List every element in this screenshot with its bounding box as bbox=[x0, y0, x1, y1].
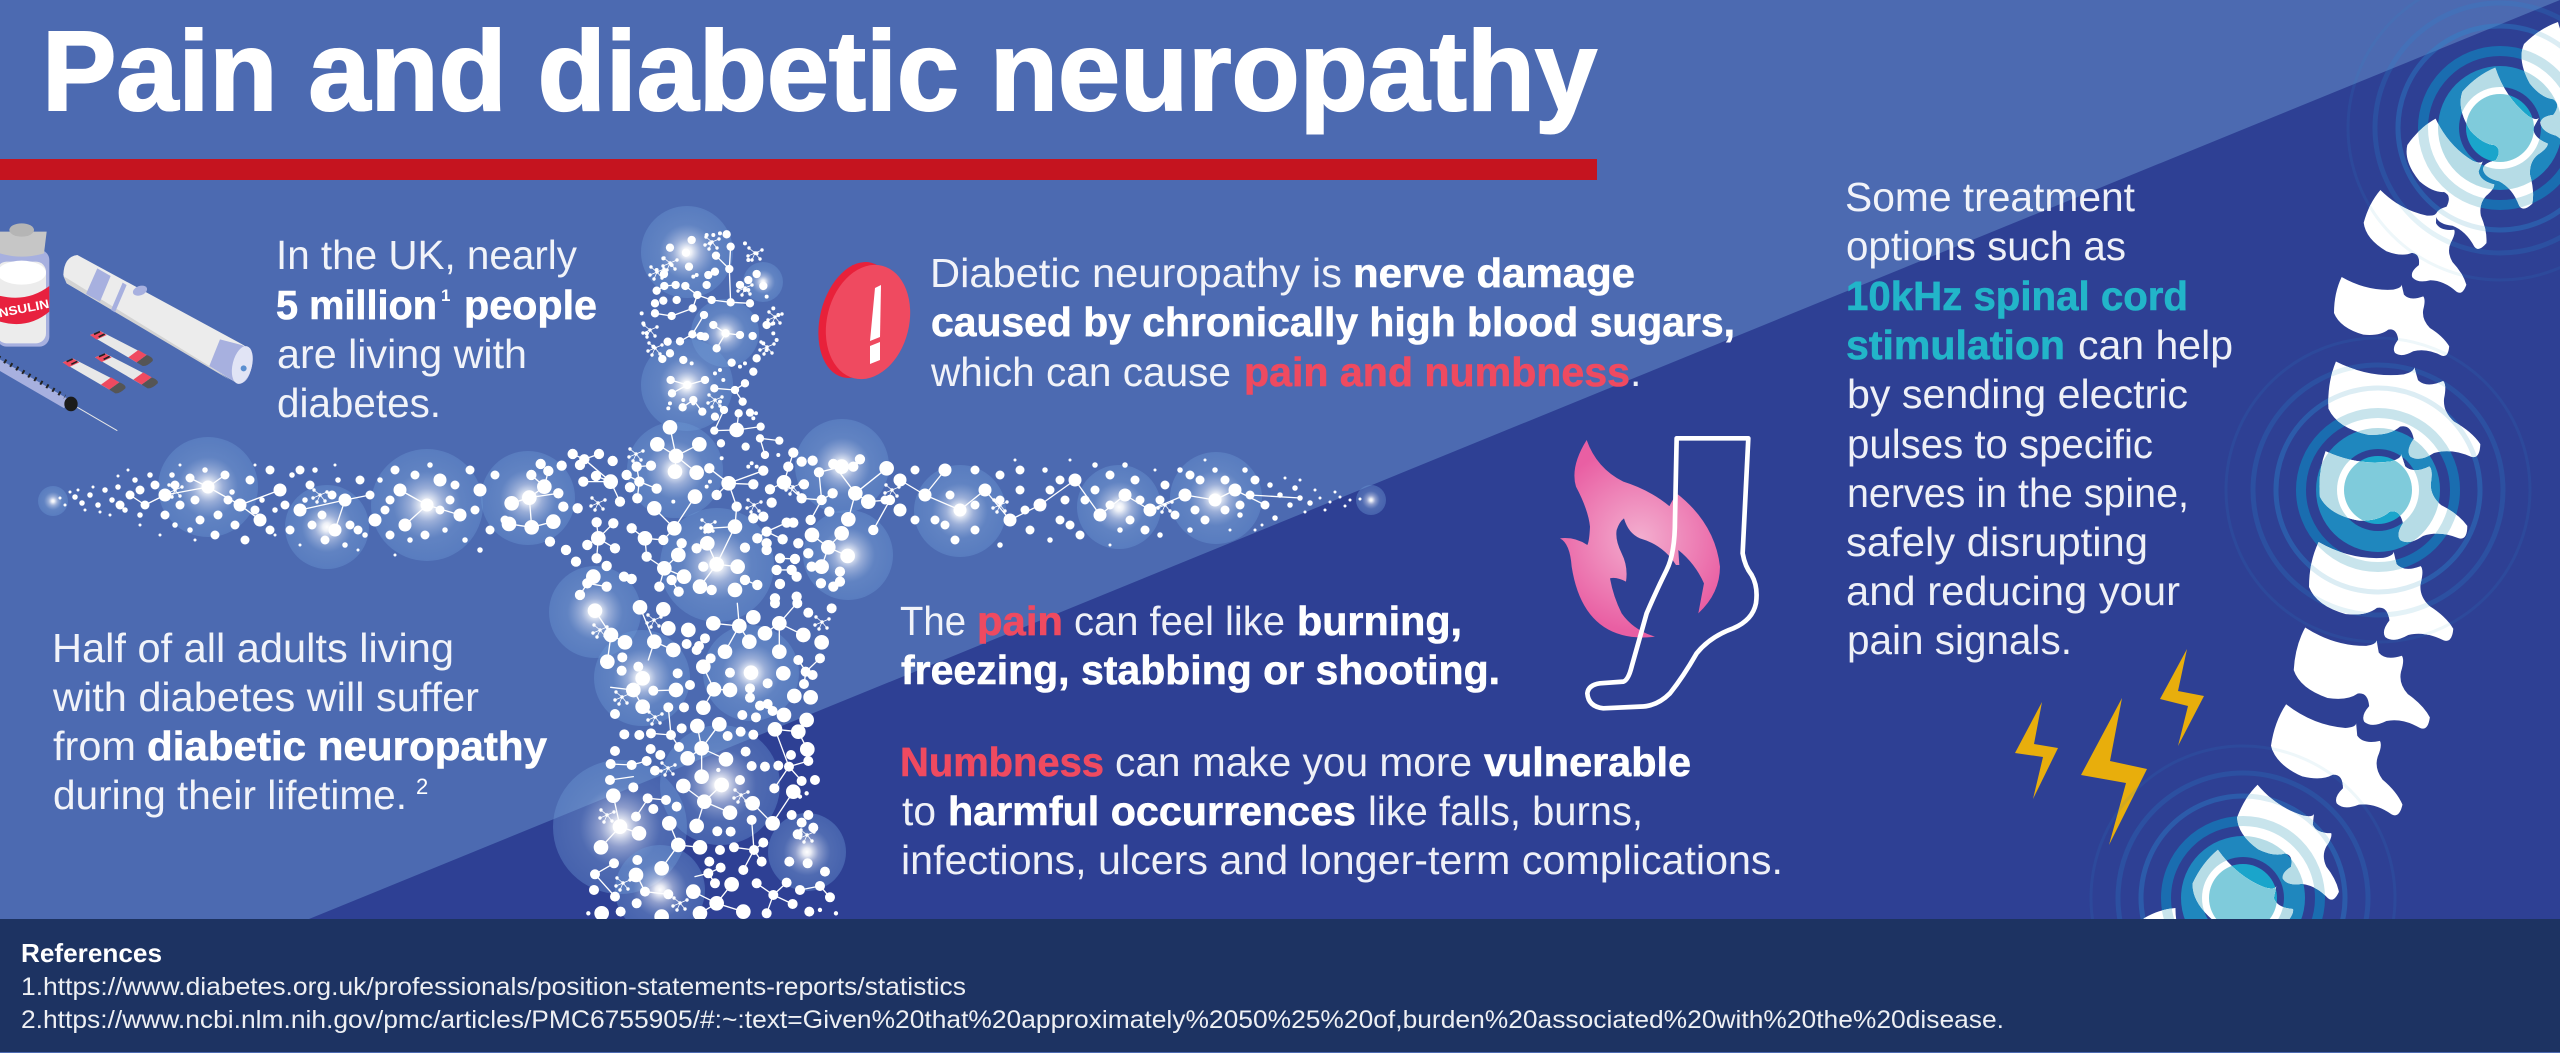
text: half of adults: during their lifetime. bbox=[53, 772, 407, 818]
text: UK statistic: diabetes. bbox=[277, 380, 441, 426]
text: definition of neuropathy: . bbox=[1630, 349, 1641, 395]
background: dark blue diagonal panel bbox=[309, 0, 2560, 919]
text: definition of neuropathy: pain and numbness bbox=[1244, 349, 1630, 395]
torso nodes bbox=[588, 603, 836, 917]
text: UK statistic: 5 million bbox=[276, 282, 437, 328]
text: half of adults: diabetic neuropathy bbox=[147, 723, 547, 769]
text: UK statistic: people bbox=[464, 282, 597, 328]
text: definition of neuropathy: Diabetic neuropathy is bbox=[930, 250, 1342, 296]
text: numbness description: like falls, burns, bbox=[1368, 788, 1643, 834]
text: UK statistic bbox=[276, 232, 597, 426]
text: treatment options: and reducing your bbox=[1846, 568, 2180, 614]
flame bbox=[1560, 440, 1720, 637]
stimulation rings bbox=[2091, 0, 2560, 1050]
text: definition of neuropathy: nerve damage bbox=[1353, 250, 1635, 296]
text: half of adults: from bbox=[53, 723, 136, 769]
footer: references panel bbox=[0, 919, 2560, 1052]
text: treatment options: 10kHz spinal cord bbox=[1846, 273, 2188, 319]
icon: exclamation warning bbox=[807, 254, 922, 388]
text: treatment options: stimulation bbox=[1846, 322, 2065, 368]
glowing bubbles bbox=[38, 206, 1386, 935]
text: UK statistic: 1 bbox=[441, 286, 450, 305]
text: treatment options: Some treatment bbox=[1845, 174, 2136, 220]
text: numbness description: Numbness bbox=[900, 739, 1104, 785]
text: numbness description: can make you more bbox=[1115, 739, 1472, 785]
text: pain description: can feel like bbox=[1074, 598, 1285, 644]
foot outline bbox=[1587, 438, 1757, 708]
text: treatment options: nerves in the spine, bbox=[1847, 470, 2189, 516]
icon: diabetes supplies bbox=[0, 223, 256, 431]
text: half of adults: Half of all adults living bbox=[52, 625, 454, 671]
text: pain description: The bbox=[900, 598, 966, 644]
insulin vial bbox=[0, 223, 50, 347]
text: pain description: freezing, stabbing or shooting. bbox=[901, 647, 1500, 693]
lancing pen bbox=[63, 255, 256, 386]
red title underline bbox=[0, 159, 1597, 180]
illustration: spine with stimulation rings bbox=[2090, 2, 2560, 919]
icon: burning foot bbox=[1560, 438, 1757, 708]
text: treatment options bbox=[1845, 174, 2233, 663]
text: numbness description: vulnerable bbox=[1484, 739, 1691, 785]
text: pain description bbox=[900, 598, 1500, 693]
text: half of adults: 2 bbox=[416, 774, 428, 799]
reference 1: 1.https://www.diabetes.org.uk/professionals/position-statements-reports/statistics bbox=[21, 973, 966, 1001]
text: half of adults bbox=[52, 625, 547, 818]
title: Pain and diabetic neuropathy bbox=[42, 8, 1597, 134]
text: treatment options: by sending electric bbox=[1847, 371, 2188, 417]
text: treatment options: options such as bbox=[1846, 223, 2126, 269]
syringe bbox=[0, 357, 117, 431]
text: definition of neuropathy bbox=[930, 250, 1735, 395]
text: definition of neuropathy: caused by chronically high blood sugars, bbox=[931, 299, 1735, 345]
text: numbness description: to bbox=[902, 788, 936, 834]
arm nodes bbox=[60, 460, 1360, 555]
text: numbness description: harmful occurrences bbox=[948, 788, 1356, 834]
text: numbness description bbox=[900, 739, 1783, 883]
text: pain description: burning, bbox=[1297, 598, 1462, 644]
test strips bbox=[63, 331, 158, 393]
text: treatment options: can help bbox=[2078, 322, 2233, 368]
references heading: References bbox=[21, 938, 162, 968]
text: UK statistic: are living with bbox=[277, 331, 527, 377]
text: UK statistic: In the UK, nearly bbox=[276, 232, 577, 278]
text: numbness description: infections, ulcers and longer-term complications. bbox=[901, 837, 1783, 883]
text: treatment options: safely disrupting bbox=[1846, 519, 2148, 565]
icon: lightning bolts bbox=[2015, 649, 2204, 845]
text: treatment options: pulses to specific bbox=[1847, 421, 2153, 467]
text: pain description: pain bbox=[977, 598, 1063, 644]
text: treatment options: pain signals. bbox=[1847, 617, 2072, 663]
human body neural network figure bbox=[38, 206, 1386, 935]
text: half of adults: with diabetes will suffer bbox=[52, 674, 479, 720]
rings tinted over vertebrae bbox=[2144, 31, 2560, 919]
small star-shaped molecules bbox=[168, 237, 1172, 910]
text: definition of neuropathy: which can cause bbox=[930, 349, 1231, 395]
vertebrae bbox=[2110, 16, 2560, 1027]
head, neck and shoulders nodes bbox=[509, 233, 890, 598]
reference 2: 2.https://www.ncbi.nlm.nih.gov/pmc/articles/PMC6755905/#:~:text=Given%20that%20approximately%2050%25%20of,burden%20associated%20with%20the%20disease. bbox=[21, 1006, 2004, 1034]
